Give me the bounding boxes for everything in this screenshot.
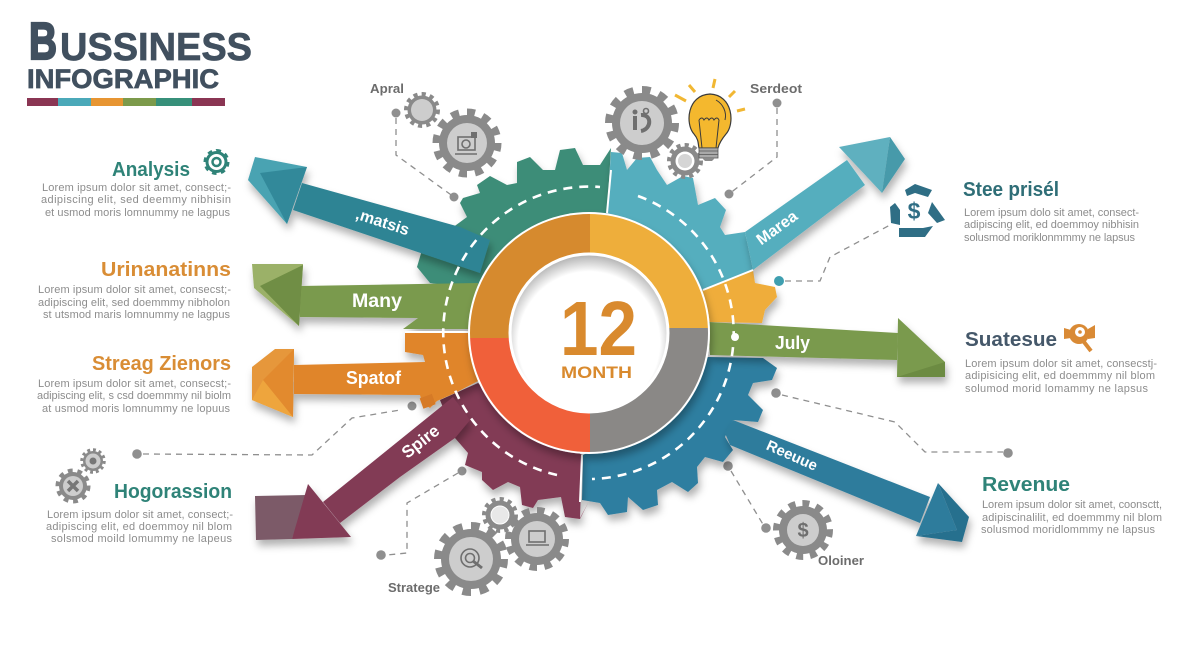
title: B [29,13,57,71]
panel: Urinanatinns: Lorem ipsum dolor sit amet, consecst;- [38,284,231,296]
panel: Streag Zienors: adipiscing elit, s csd doemmmy nil biolm [37,390,231,402]
panel: Suatesue [965,324,1157,395]
connector: Revenue side [771,388,1013,458]
panel: Hogorassion: adipiscing elit, ed doemmoy nil blom [46,521,232,533]
panel: Suatesue: Lorem ipsum dolor sit amet, consecstj- [965,358,1157,370]
gear sector: yellow [680,270,777,323]
panel: Stee prisel: Lorem ipsum dolo sit amet, consect- [964,207,1139,219]
arrow: orange Spatof [252,333,480,417]
arrow: olive Many [252,264,478,329]
panel: Streag Zienors [37,353,231,415]
arrow labels: July [775,333,810,353]
icon: dollar cycle [890,184,945,237]
panel: Hogorassion: Lorem ipsum dolor sit amet, consect;- [47,509,233,521]
panel: Stee prisel: solusmod moriklonmmmy ne lapsus [964,232,1136,244]
panel: Analysis: adipiscing elit, sed deemmy nibhisin [41,194,231,206]
gear: small lower [484,500,516,530]
gear sector: light teal [607,152,753,290]
panel: Revenue: adipiscinalilit, ed doemmmy nil blom [982,512,1162,524]
icon: gear [206,151,228,173]
panel: Suatesue: Suatesue [965,329,1057,351]
panel: Hogorassion: solsmod moild lomummy ne lapeus [51,533,232,545]
arrow: blue Reeuue [725,420,969,542]
gear: target [439,527,503,591]
panel: Urinanatinns: Urinanatinns [101,259,231,281]
title [27,13,252,94]
panel: Revenue: Revenue [982,474,1070,496]
arrow: olive July [708,318,945,377]
connector: Serdeot [724,98,782,198]
gear sector: green [417,148,611,333]
connector: Stee prisel [774,225,890,286]
label: Serdeot: Serdeot [750,81,803,96]
arrow: maroon Spire [255,397,470,540]
arrow: teal Marea [745,137,905,270]
gear sector: maroon [440,383,588,519]
panel: Suatesue: adipisicing elit, ed doemmmy nil blom [965,370,1155,382]
center label: MONTH [561,363,632,382]
panel: Stee prisel: Stee prisél [963,179,1059,201]
icon: dollar cycle: $ [908,198,921,224]
panel: Revenue: solusmod moridlommmy ne lapsus [981,524,1156,536]
icon: orange magnifier [1064,324,1095,351]
arrow: teal Analysis [248,157,490,273]
center number: 12 [560,286,637,372]
panel: Urinanatinns [38,259,231,321]
gear: dollar: $ [797,520,809,542]
gear: camera [437,113,497,173]
panel: Revenue: Lorem ipsum dolor sit amet, coonsctt, [982,499,1162,511]
label: Stratege: Stratege [388,580,440,595]
arrow labels: Marea [754,208,801,249]
connector: Hogorassion [132,402,416,459]
connector: Oloiner [723,461,771,533]
gear: left small [82,450,104,472]
panel: Stee prisel [890,179,1139,244]
center ring [468,210,712,456]
title: INFOGRAPHIC [27,64,219,94]
white dashed orbit [443,187,734,479]
panel: Revenue [981,474,1162,536]
title colour bar [27,98,225,106]
gear: laptop [509,511,565,567]
gear: small right [670,146,700,176]
panel: Hogorassion: Hogorassion [114,481,232,503]
gear: dollar [777,504,829,556]
label: Oloiner: Oloiner [818,553,864,568]
gear: info [610,91,674,155]
panel: Streag Zienors: at usmod moris lomnummy ne lopuus [42,403,230,415]
arrow labels: ,matsis [354,206,411,239]
gear: left large [58,471,88,501]
connector: Stratege [376,466,466,560]
gear: small top left [406,94,438,126]
label: Apral: Apral [370,81,404,96]
gear sector: blue [582,357,777,515]
panel: Analysis [41,151,231,219]
title: USSINESS [60,26,252,69]
panel: Analysis: et usmod moris lomnummy ne lagpus [45,207,230,219]
panel: Hogorassion [46,481,233,545]
sector separators [405,170,753,502]
arrow labels: Spatof [346,368,402,388]
panel: Streag Zienors: Streag Zienors [92,353,231,375]
arrow labels [346,206,820,475]
arrow labels: Reeuue [764,437,820,475]
icon: light bulb [675,79,745,161]
panel: Streag Zienors: Lorem ipsum dolor sit amet, consecst;- [38,378,231,390]
connector: Apral [392,108,458,202]
July orbit marker [731,333,739,341]
panel: Suatesue: solumod morid lomammy ne lapsus [965,383,1148,395]
arrow labels: Many [352,291,402,312]
panel: Urinanatinns: adipiscing elit, sed doemmmy nibholon [38,297,230,309]
panel: Urinanatinns: st utsmod maris lomnummy ne lagpus [43,309,230,321]
arrow labels: Spire [398,421,443,462]
panel: Analysis: Lorem ipsum dolor sit amet, consect;- [42,182,231,194]
panel: Stee prisel: adipiscing elit, ed doemmoy nibhisin [964,219,1139,231]
panel: Analysis: Analysis [112,159,190,181]
